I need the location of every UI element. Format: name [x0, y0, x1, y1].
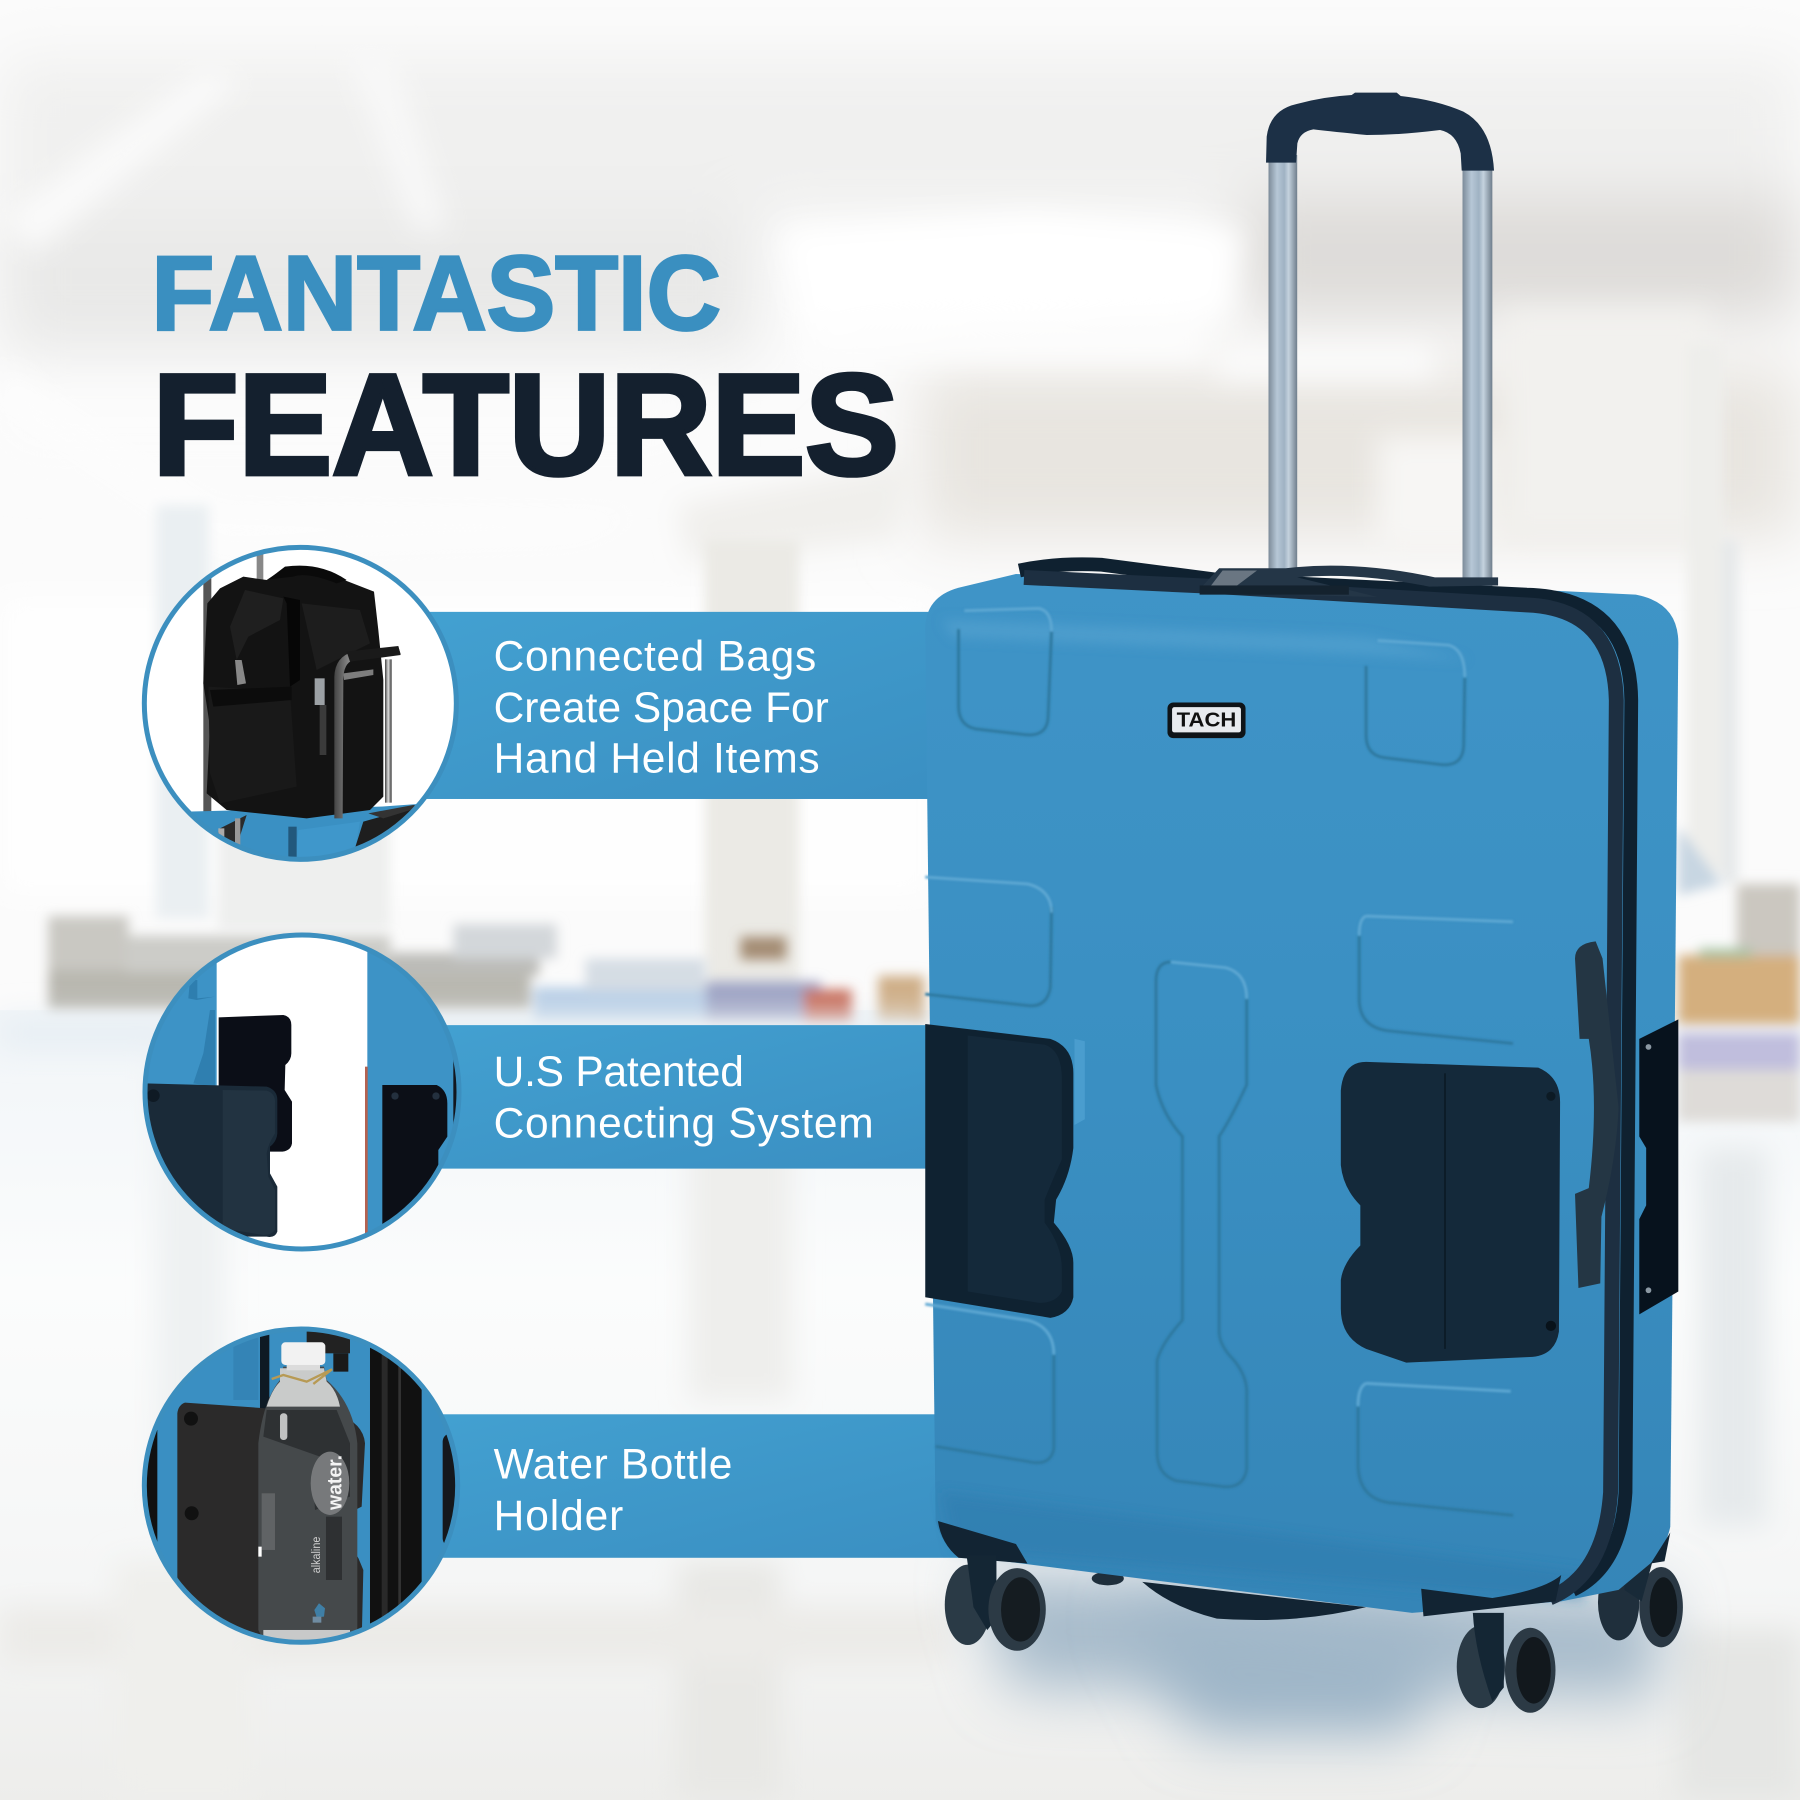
logo badge: TACH — [1177, 709, 1236, 732]
label: connected bags — [494, 632, 829, 782]
label: connected bags: Connected Bags — [494, 632, 816, 679]
embossed panels — [925, 608, 1513, 1515]
connector panel left — [925, 1024, 1085, 1318]
feature band 2 — [390, 1025, 941, 1169]
heading: FANTASTIC: FANTASTIC — [152, 234, 721, 352]
emboss shadows — [925, 629, 1513, 1515]
glossy highlights — [941, 620, 1584, 1601]
side carry handle — [1575, 941, 1619, 1288]
label: water bottle holder — [494, 1441, 732, 1539]
circle photo: water bottle holder: alkaline — [309, 1536, 323, 1573]
label: water bottle holder: Water Bottle — [494, 1441, 732, 1488]
label: connected bags: Hand Held Items — [494, 735, 820, 782]
circle photo: connecting system — [143, 920, 467, 1267]
feature band 3 — [390, 1414, 964, 1558]
label: connecting system — [494, 1048, 874, 1147]
connector panel right — [1341, 1062, 1560, 1363]
front left wheels — [945, 1555, 1046, 1651]
label: connected bags: Create Space For — [494, 684, 829, 731]
telescoping handle — [1266, 93, 1494, 591]
circle photo: water bottle holder: water. — [325, 1455, 347, 1511]
front right wheels — [1457, 1613, 1555, 1713]
label: connecting system: U.S Patented — [494, 1048, 744, 1095]
circle photo: backpack on luggage — [144, 547, 457, 870]
label: connecting system: Connecting System — [494, 1100, 874, 1147]
top carry handle and lock — [1200, 566, 1498, 597]
feet and bottom handle — [938, 1521, 1670, 1620]
rear wheels — [1092, 1538, 1683, 1647]
emboss highlights — [925, 608, 1513, 1406]
side connector panel — [1639, 1019, 1678, 1314]
feature band 1 — [390, 612, 941, 799]
suitcase — [925, 93, 1683, 1713]
suitcase body — [925, 574, 1678, 1613]
zipper seam — [1019, 564, 1631, 1598]
circle photo: water bottle holder — [140, 1327, 459, 1647]
heading: FEATURES: FEATURES — [153, 345, 899, 505]
logo badge — [1167, 703, 1246, 738]
label: water bottle holder: Holder — [494, 1492, 623, 1539]
title — [152, 234, 899, 505]
